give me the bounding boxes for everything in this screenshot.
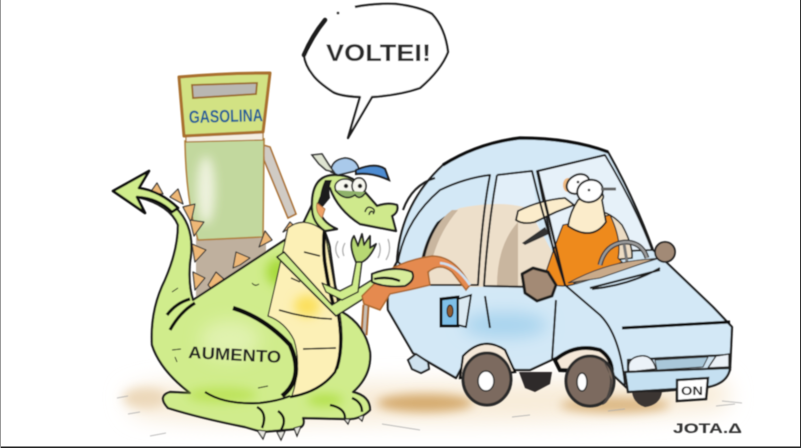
front grille and headlights [625,354,730,401]
dragon bandana [312,154,334,172]
car door frames [398,155,660,385]
car [388,138,732,407]
ground shadow [123,378,730,423]
dragon waving hand [351,234,376,262]
pump lower base [196,238,266,300]
dragon head [312,175,397,231]
dragon [113,154,397,440]
driver arm [516,198,574,223]
dragon body contours [167,225,362,430]
front grille and headlights: ON [681,384,703,398]
front bumper [625,368,730,392]
driver neck and head [568,190,606,233]
dragon claws [257,415,364,440]
fuel pump [179,73,296,300]
dragon arms [277,252,388,316]
hood lines [622,322,730,328]
dragon spikes [150,183,294,292]
dragon ear [317,203,325,218]
rear wheel [460,344,515,405]
driver eyes [563,178,573,192]
pump window [192,83,257,98]
dragon lettering: AUMENTO [188,343,282,367]
speech text: VOLTEI! [326,40,431,67]
dragon body [138,192,370,432]
driver shirt [544,215,622,286]
driver [516,170,647,286]
fuel cap [441,295,471,327]
speech bubble [304,4,448,138]
front wheel [555,348,614,406]
dragon eyes [335,178,366,198]
pump body [185,139,264,240]
dashboard [574,258,660,284]
tail light [408,354,429,373]
steering wheel [600,242,647,265]
ground scratches [117,396,742,436]
side mirrors [522,268,556,301]
dragon tail arrowhead [113,171,178,213]
license plate [677,378,708,401]
car interior seats [418,204,566,287]
dragon hand on nozzle [372,269,413,286]
fuel nozzle [362,256,470,310]
dragon belly [268,222,342,396]
dragon cap [331,158,359,175]
artist signature: JOTA.Δ [673,420,742,436]
pump hose [263,145,296,218]
car body [388,138,732,393]
pump white band [186,132,263,142]
under car shadow [519,372,552,392]
pump label: GASOLINA [189,105,263,127]
pump head panel [179,73,270,136]
pump nozzle hose to dragon [364,305,366,335]
car windows white [490,171,540,235]
